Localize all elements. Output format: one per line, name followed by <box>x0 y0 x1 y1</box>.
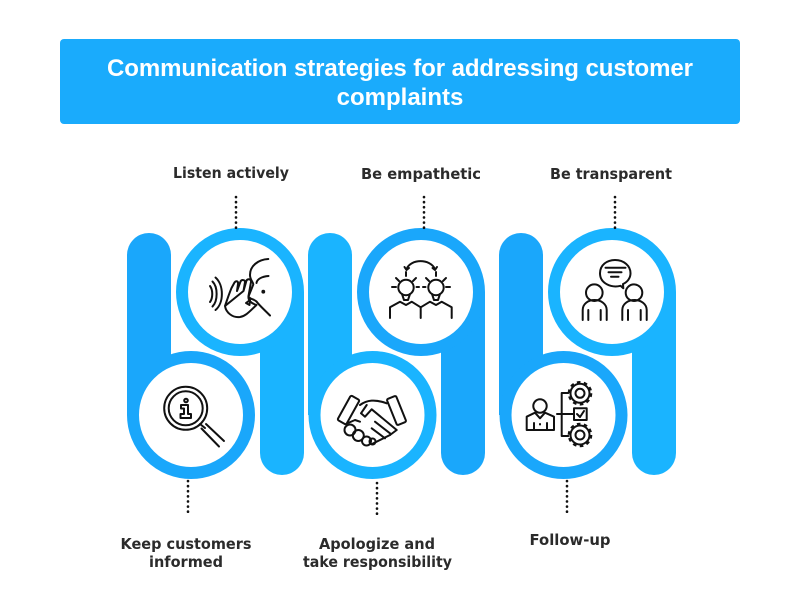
icon: two people with light bulbs <box>390 261 452 318</box>
icon: listening ear and hand <box>210 259 270 317</box>
label: apologize and take responsibility: Apologize and <box>319 535 435 553</box>
title banner: complaints <box>337 84 463 111</box>
icon: two people talking <box>583 260 647 320</box>
right pill <box>260 292 304 475</box>
label: keep customers informed <box>120 535 252 571</box>
connector: apologize <box>376 483 378 518</box>
icon: person with tasks and gears <box>527 382 591 446</box>
title banner: Communication strategies for addressing customer <box>107 55 693 82</box>
label: be empathetic: Be empathetic <box>361 165 481 183</box>
ring: apologize <box>314 357 430 473</box>
title banner <box>60 39 740 124</box>
left pill <box>308 233 352 415</box>
label: listen actively: Listen actively <box>173 164 289 182</box>
panel: be transparent and follow-up <box>499 233 676 475</box>
connector: follow-up <box>566 481 568 515</box>
label: follow-up: Follow-up <box>530 531 611 549</box>
ring: follow-up <box>506 357 622 473</box>
label: keep customers informed: Keep customers <box>120 535 252 553</box>
label: keep customers informed: informed <box>149 553 223 571</box>
ring: be empathetic <box>363 234 479 350</box>
connector: keep customers informed <box>187 481 189 515</box>
icon: handshake <box>337 395 406 446</box>
ring: be transparent <box>554 234 670 350</box>
left pill <box>499 233 543 415</box>
connector: listen actively <box>235 197 237 228</box>
connector: be empathetic <box>423 197 425 228</box>
ring: listen actively <box>182 234 298 350</box>
panel: be empathetic and apologize <box>308 233 485 475</box>
label: apologize and take responsibility <box>303 535 452 571</box>
ring: keep customers informed <box>133 357 249 473</box>
label: apologize and take responsibility: take responsibility <box>303 553 452 571</box>
panel: listen actively and keep customers informed <box>127 233 304 475</box>
right pill <box>632 292 676 475</box>
icon: magnifier with info sign <box>164 387 224 446</box>
right pill <box>441 292 485 475</box>
left pill <box>127 233 171 415</box>
connector: be transparent <box>614 197 616 228</box>
label: be transparent: Be transparent <box>550 165 672 183</box>
